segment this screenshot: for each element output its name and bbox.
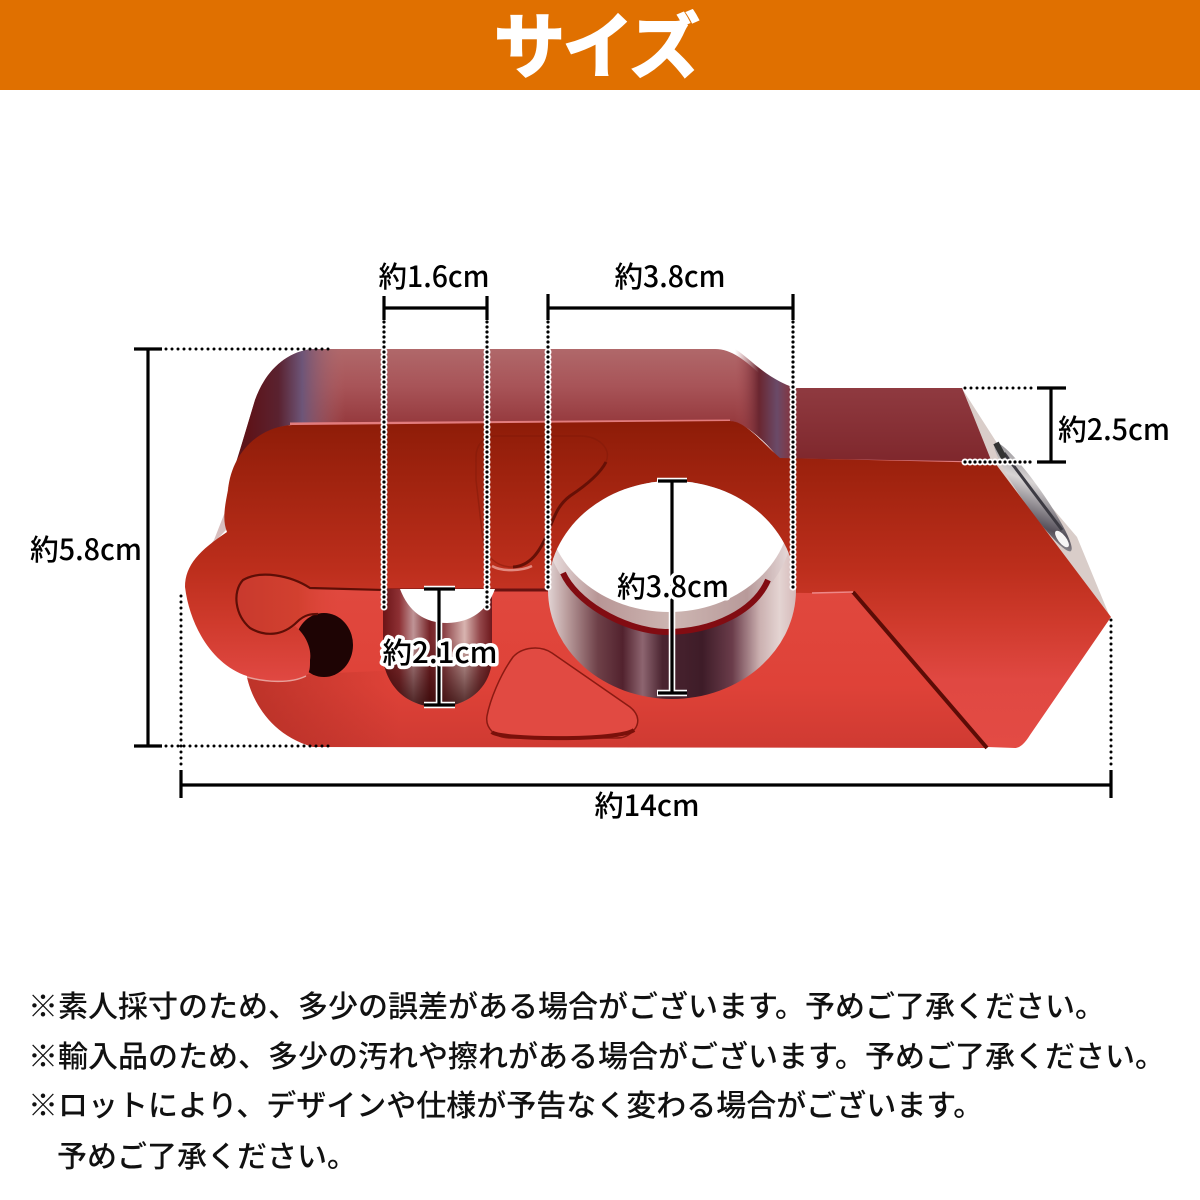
lower raised pad [487,648,638,738]
product photo: red grip lock [185,349,1111,748]
top face [205,349,993,552]
label inner 3.8cm: 約3.8cm [617,564,729,606]
dimension: top 3.8cm [548,254,793,592]
label 5.8cm: 約5.8cm [30,527,142,569]
notes [28,982,1165,1176]
header bar [0,0,1200,93]
dimension: overall height 5.8cm [30,349,332,746]
note line 2: ※輸入品のため、多少の汚れや擦れがある場合がございます。予めご了承ください。 [28,1032,1165,1076]
upper jaw and right block [185,421,1111,748]
label 2.5cm: 約2.5cm [1058,407,1170,449]
note line 1: ※素人採寸のため、多少の誤差がある場合がございます。予めご了承ください。 [28,982,1105,1026]
key cylinder side [963,390,1110,617]
see-through opening [557,482,784,612]
diagonal seam [853,592,987,748]
upper raised pad [476,436,607,570]
dimension: overall width 14cm [181,596,1111,825]
large round hole [548,482,796,699]
label 14cm: 約14cm [594,783,700,825]
lower jaw [236,575,987,748]
label top 3.8cm: 約3.8cm [614,254,726,296]
dimension: thickness 2.5cm [965,388,1170,462]
dimension: top 1.6cm [378,254,490,612]
hook tongue [236,575,345,634]
dimension: slot 2.1cm [382,589,498,705]
note line 3: ※ロットにより、デザインや仕様が予告なく変わる場合がございます。 [28,1081,983,1125]
hook opening [295,613,353,677]
dimension: hole inner 3.8cm [617,481,729,693]
note line 4: 予めご了承ください。 [57,1132,357,1176]
label 1.6cm: 約1.6cm [378,254,490,296]
label 2.1cm: 約2.1cm [382,630,498,672]
small slot [383,589,495,707]
upper silver band [552,482,788,629]
groove [563,573,768,632]
hook groove [236,575,385,634]
